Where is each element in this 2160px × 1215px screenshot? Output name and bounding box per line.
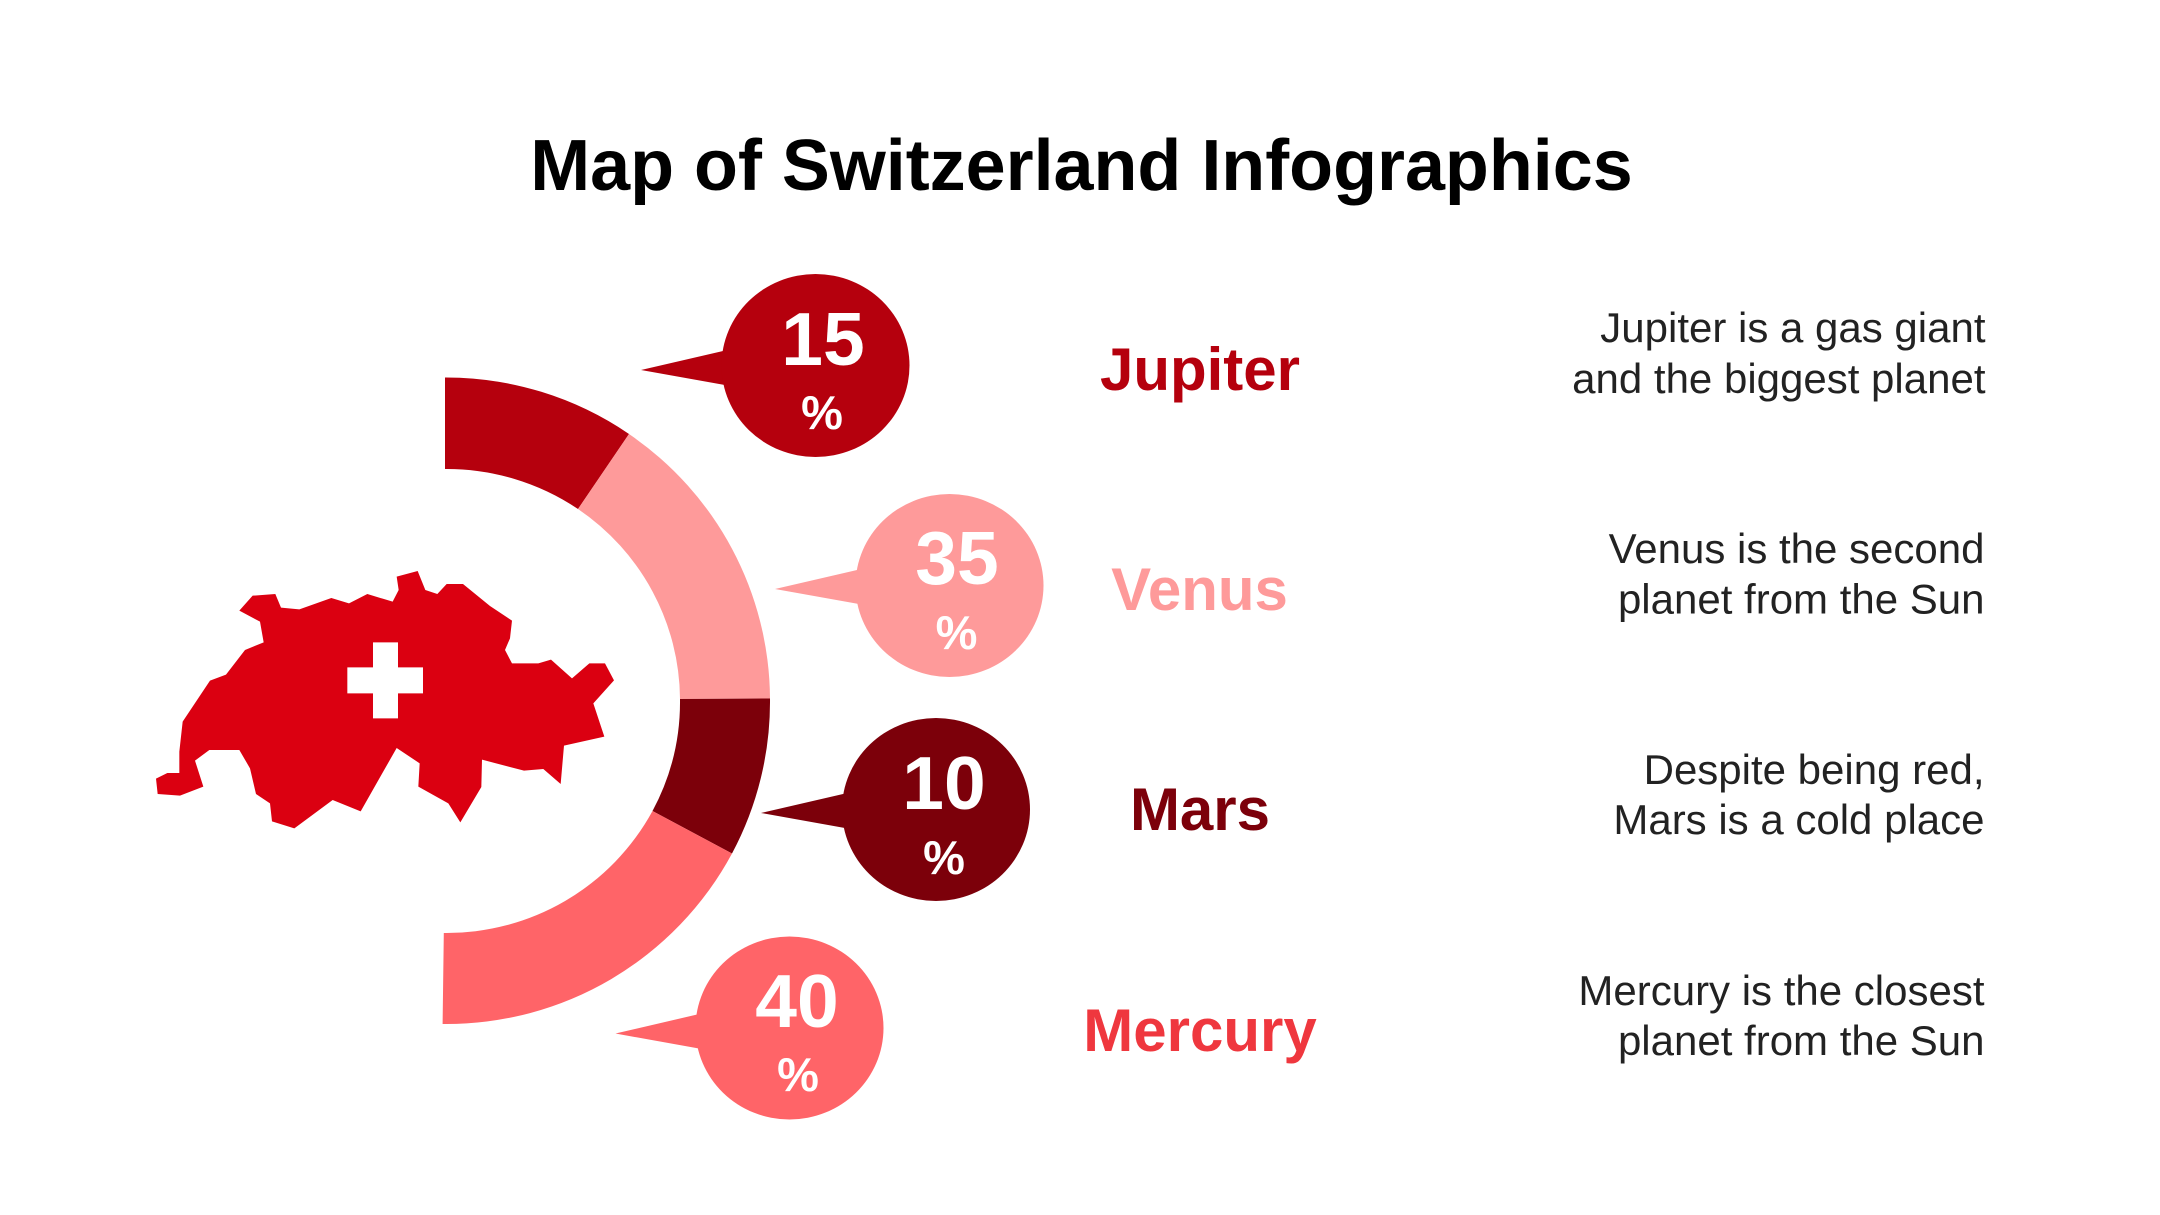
- callout: 15 percent: [641, 274, 910, 457]
- callout: 35 percent: %: [936, 606, 977, 659]
- ring segment: Mercury: [443, 811, 732, 1024]
- label: Mercury: Mercury: [1083, 997, 1317, 1064]
- callout: 35 percent: 35: [915, 516, 999, 600]
- icon: map of Switzerland with cross: [156, 571, 614, 828]
- callout: 35 percent: [775, 494, 1044, 677]
- text block: Mercury description: [1578, 967, 1985, 1064]
- title: Map of Switzerland Infographics: [530, 126, 1633, 206]
- callout: 40 percent: [616, 936, 884, 1120]
- text block: Mars description: Mars is a cold place: [1613, 796, 1984, 843]
- label: Mars: Mars: [1130, 776, 1270, 843]
- callout: 10 percent: %: [923, 831, 965, 884]
- text block: Venus description: planet from the Sun: [1618, 576, 1984, 622]
- text block: Venus description: [1609, 525, 1984, 622]
- text block: Jupiter description: [1572, 304, 1986, 402]
- text block: Jupiter description: Jupiter is a gas giant: [1600, 304, 1986, 351]
- text block: Jupiter description: and the biggest planet: [1572, 355, 1986, 402]
- callout: 10 percent: 10: [902, 741, 986, 825]
- callout: 40 percent: 40: [755, 959, 839, 1043]
- label: Jupiter: Jupiter: [1100, 336, 1300, 403]
- label: Venus: Venus: [1111, 556, 1288, 623]
- text block: Mars description: Despite being red,: [1644, 746, 1984, 793]
- callout: 40 percent: %: [777, 1048, 819, 1101]
- callout: 15 percent: 15: [781, 297, 865, 381]
- chart: semicircular ring: [443, 377, 770, 1024]
- callout: 15 percent: %: [801, 386, 843, 439]
- text block: Mercury description: planet from the Sun: [1618, 1017, 1984, 1064]
- text block: Mercury description: Mercury is the closest: [1578, 967, 1985, 1014]
- ring segment: Jupiter: [445, 377, 629, 509]
- text block: Venus description: Venus is the second: [1609, 525, 1984, 572]
- text block: Mars description: [1613, 746, 1984, 843]
- ring segment: Mars: [652, 698, 770, 854]
- ring segment: Venus: [578, 434, 770, 699]
- callout: 10 percent: [761, 718, 1030, 901]
